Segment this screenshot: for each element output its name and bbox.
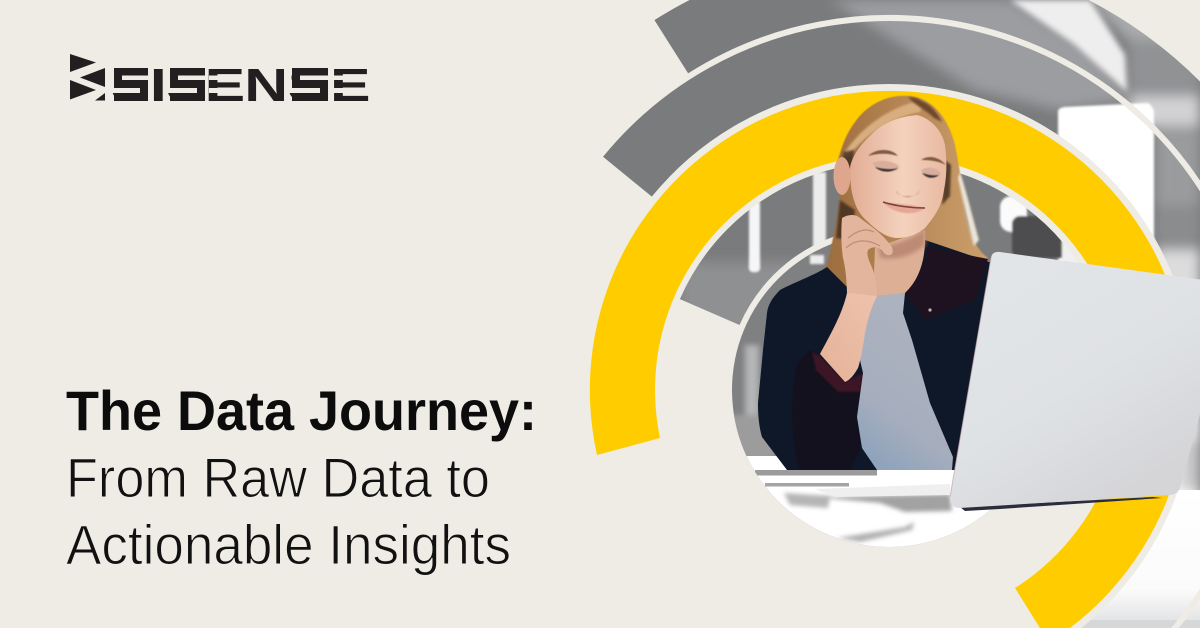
table papers and shadows — [755, 470, 952, 542]
inner ring photo — [680, 172, 1080, 332]
hair shadow — [836, 150, 951, 240]
hair highlight — [843, 100, 925, 158]
hand — [841, 215, 893, 296]
neck — [873, 230, 925, 296]
mouth — [883, 202, 925, 213]
laptop dark edge — [960, 497, 1162, 511]
sleeve cuff — [812, 352, 863, 392]
jacket lapel — [905, 247, 988, 320]
headline line 3: Actionable Insights — [66, 513, 511, 576]
nose shade — [896, 190, 920, 197]
yellow ring segment — [590, 91, 1188, 628]
ear — [834, 157, 850, 195]
sleeve — [792, 350, 863, 470]
hair — [818, 96, 988, 290]
laptop lid — [950, 252, 1200, 508]
bright diagonal beam — [1010, 0, 1127, 92]
jacket button — [928, 308, 932, 312]
eyebrows — [868, 150, 946, 165]
hair crown shadow — [908, 97, 942, 122]
white column — [1058, 103, 1154, 280]
headline line 1: The Data Journey: — [66, 379, 537, 442]
sweater — [857, 293, 953, 470]
headline line 2: From Raw Data to — [66, 446, 490, 509]
photo background rings — [580, 0, 1200, 628]
laptop edge tint — [950, 258, 991, 497]
logo mark — [70, 54, 105, 100]
eyelids — [872, 161, 941, 177]
mouth line — [883, 202, 925, 208]
logo wordmark: SISENSE — [111, 60, 371, 111]
face — [850, 115, 946, 238]
logo: Sisense — [70, 54, 374, 111]
hair wisps — [958, 172, 979, 246]
eyes — [875, 167, 939, 178]
woman — [758, 96, 1200, 511]
neck shadow — [878, 228, 925, 259]
forearm — [820, 293, 877, 382]
jacket — [758, 240, 990, 470]
table — [746, 456, 990, 547]
finger lines — [846, 230, 880, 248]
photo disk — [732, 244, 991, 547]
headline — [66, 379, 537, 576]
